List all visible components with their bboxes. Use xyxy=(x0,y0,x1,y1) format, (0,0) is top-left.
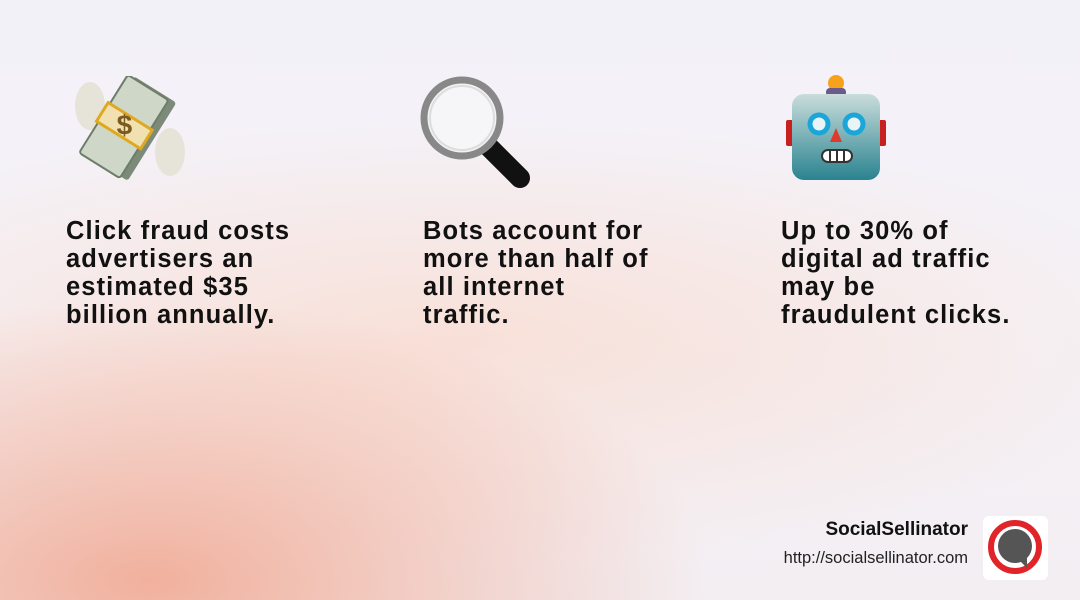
text: fact 3: fraudulent clicks. xyxy=(781,301,1011,329)
text: fact 1: billion annually. xyxy=(66,301,276,329)
icon: robot xyxy=(786,75,886,180)
text: fact 3: digital ad traffic xyxy=(781,245,991,273)
text: fact 2: more than half of xyxy=(423,245,649,273)
text: fact 2: traffic. xyxy=(423,301,510,329)
brand name: SocialSellinator xyxy=(825,519,968,540)
text: fact 2 xyxy=(423,217,649,329)
logo xyxy=(983,516,1048,580)
text: fact 3: may be xyxy=(781,273,875,301)
text: fact 3: Up to 30% of xyxy=(781,217,949,245)
icon: flying money xyxy=(75,76,185,180)
brand url: http://socialsellinator.com xyxy=(784,549,968,567)
icon: magnifying glass xyxy=(420,76,530,188)
text: fact 3 xyxy=(781,217,1011,329)
text: fact 2: Bots account for xyxy=(423,217,643,245)
text: fact 1: estimated $35 xyxy=(66,273,249,301)
text: fact 1 xyxy=(66,217,290,329)
icon: flying money: $ xyxy=(117,110,133,141)
text: fact 1: advertisers an xyxy=(66,245,254,273)
text: fact 2: all internet xyxy=(423,273,565,301)
text: fact 1: Click fraud costs xyxy=(66,217,290,245)
